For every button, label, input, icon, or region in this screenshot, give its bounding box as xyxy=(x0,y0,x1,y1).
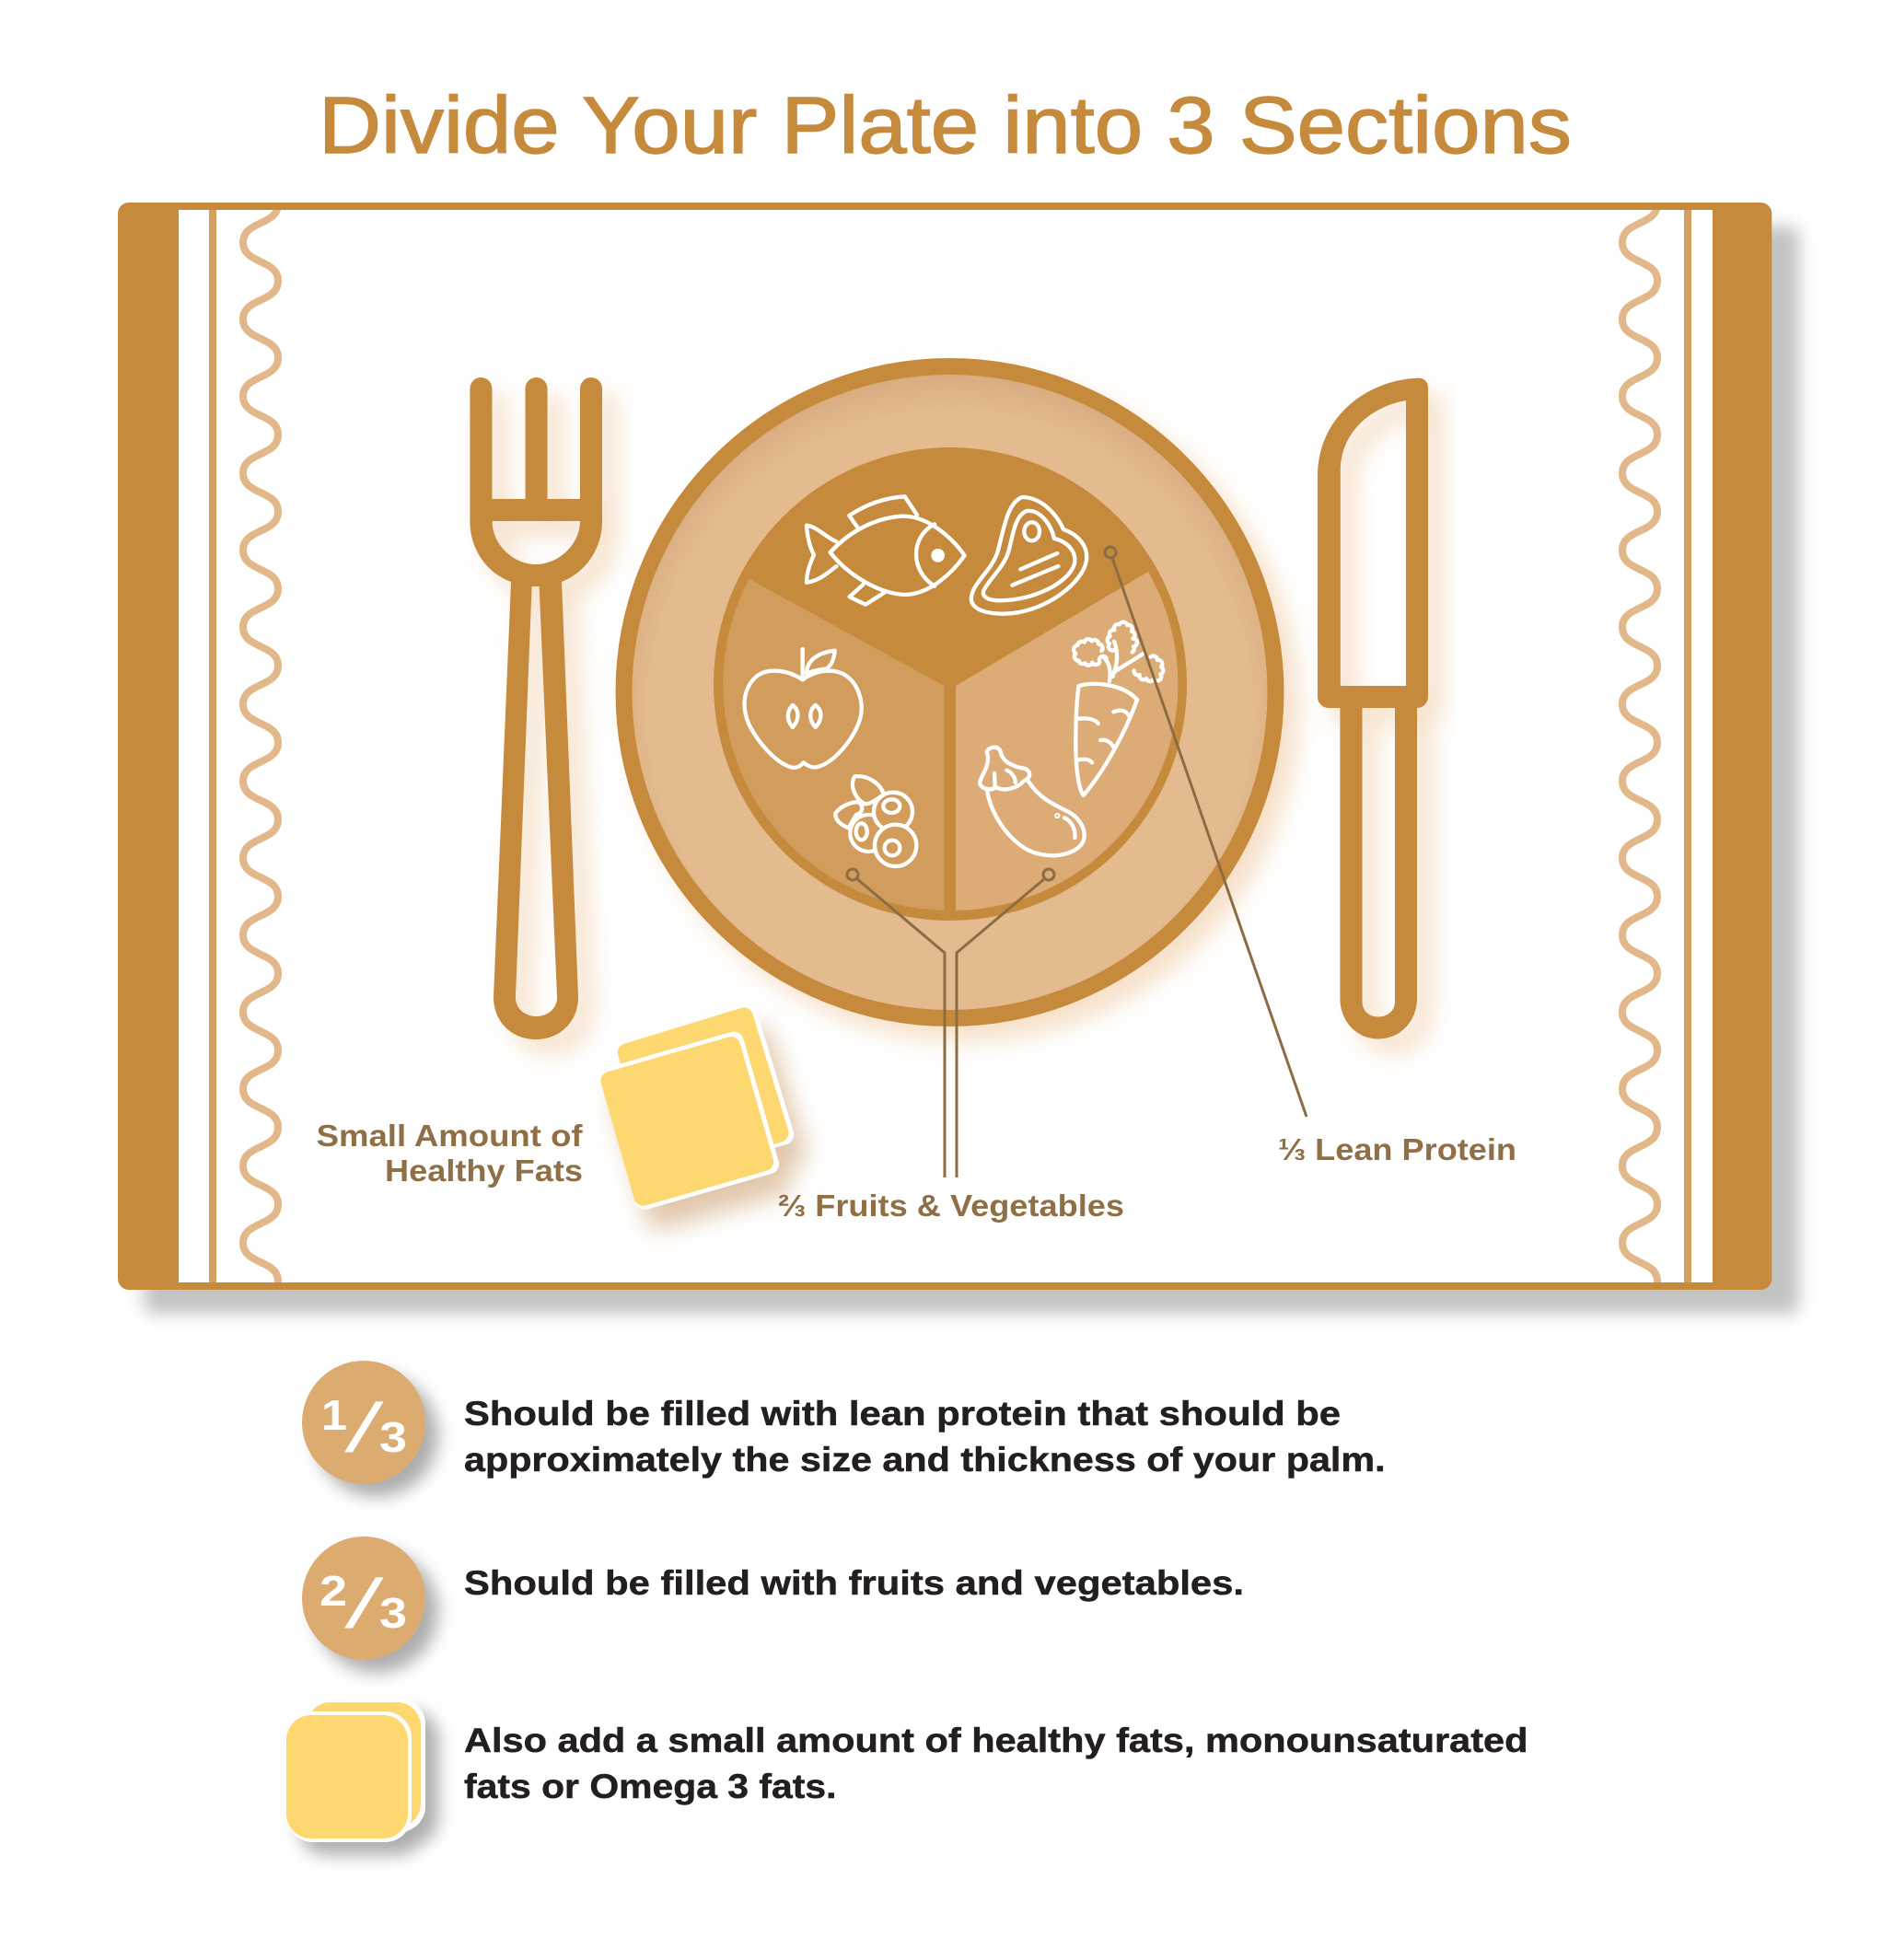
icons: fish and steak xyxy=(807,496,1086,614)
legend: two thirds badge xyxy=(302,1537,425,1660)
label: healthy fats: Small Amount of xyxy=(317,1119,584,1153)
label: healthy fats: Healthy Fats xyxy=(385,1154,583,1188)
label: lean protein: ⅓ Lean Protein xyxy=(1278,1132,1516,1166)
icon: knife xyxy=(1318,378,1428,1039)
legend: healthy fats text xyxy=(464,1722,1528,1805)
legend: healthy fats text: Also add a small amount of healthy fats, monounsaturated xyxy=(464,1722,1528,1759)
panel: placemat xyxy=(118,203,1799,1358)
legend: one third text: Should be filled with lean protein that should be xyxy=(464,1395,1341,1432)
section: fruits xyxy=(723,579,945,910)
icon: carrot xyxy=(1074,622,1163,795)
icon: butter xyxy=(598,1004,796,1212)
icon: eggplant xyxy=(980,748,1085,855)
plate inner circle xyxy=(714,447,1187,921)
label: fruits and vegetables: ⅔ Fruits & Vegetables xyxy=(778,1189,1124,1223)
leader lines xyxy=(847,547,1307,1177)
legend: two thirds badge: 2 xyxy=(319,1567,347,1615)
icons: apple and berries xyxy=(745,649,916,866)
icon: plate xyxy=(624,366,1276,1018)
section: vegetables xyxy=(956,572,1178,910)
title: Divide Your Plate into 3 Sections xyxy=(319,81,1572,170)
legend: one third badge: 1 xyxy=(321,1391,347,1439)
icon: fish xyxy=(807,496,965,605)
icon: steak xyxy=(971,497,1086,614)
label: healthy fats xyxy=(317,1119,584,1188)
icon: fork xyxy=(470,377,602,1039)
legend: butter icon xyxy=(286,1699,425,1842)
legend: one third text: approximately the size and thickness of your palm. xyxy=(464,1441,1386,1479)
legend: two thirds text: Should be filled with fruits and vegetables. xyxy=(464,1564,1244,1602)
plate rim xyxy=(624,366,1276,1018)
legend: two thirds badge: 3 xyxy=(379,1589,407,1637)
legend: one third text xyxy=(464,1395,1386,1479)
icons: carrot and eggplant xyxy=(980,622,1163,855)
icon: berries xyxy=(835,776,916,866)
legend: one third badge xyxy=(302,1361,425,1484)
legend: one third badge: / xyxy=(338,1390,389,1466)
legend: healthy fats text: fats or Omega 3 fats. xyxy=(464,1768,836,1805)
icon: apple xyxy=(745,649,862,768)
legend: two thirds badge: / xyxy=(338,1566,389,1641)
legend: one third badge: 3 xyxy=(379,1413,407,1461)
